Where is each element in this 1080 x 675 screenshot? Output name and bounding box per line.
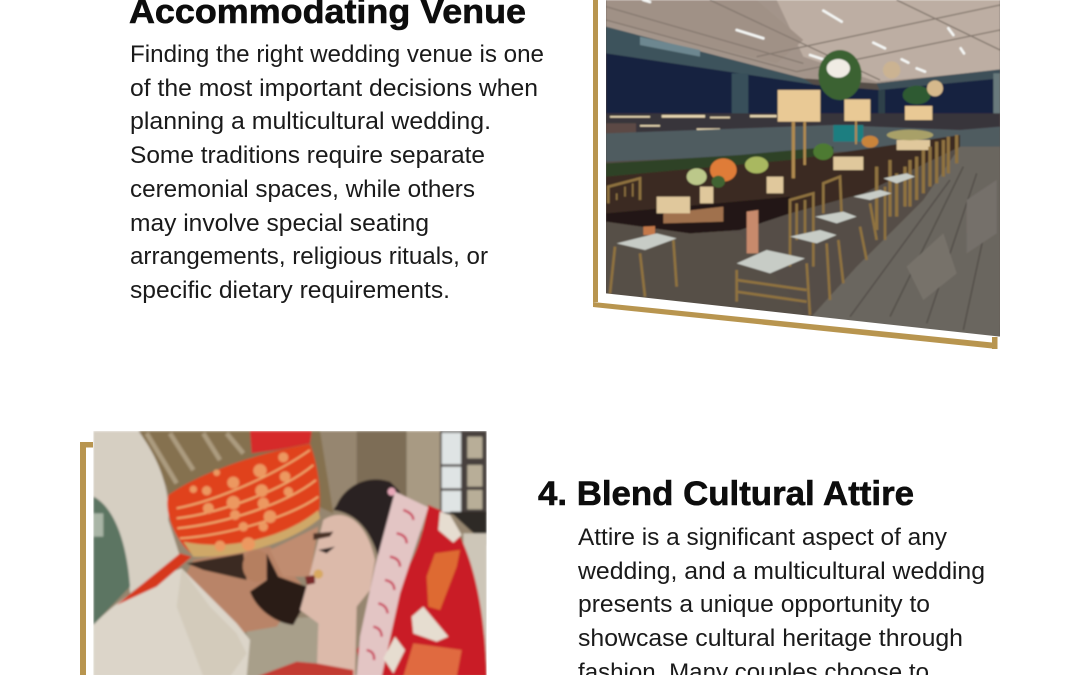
paragraph: venue description: Some traditions require separate <box>130 142 485 169</box>
paragraph: attire description: presents a unique opportunity to <box>578 591 930 618</box>
paragraph: venue description: Finding the right wedding venue is one <box>130 41 544 68</box>
paragraph: venue description <box>130 41 544 304</box>
paragraph: venue description: specific dietary requirements. <box>130 277 450 304</box>
paragraph: attire description: Attire is a significant aspect of any <box>578 524 947 551</box>
paragraph: venue description: of the most important decisions when <box>130 75 538 102</box>
section 3 text: accommodating venue <box>129 0 544 304</box>
paragraph: venue description: planning a multicultural wedding. <box>130 108 491 135</box>
paragraph: attire description: wedding, and a multicultural wedding <box>577 558 985 585</box>
paragraph: attire description <box>577 524 985 675</box>
paragraph: venue description: arrangements, religious rituals, or <box>130 243 488 270</box>
heading: blend cultural attire: 4. Blend Cultural Attire <box>538 475 914 513</box>
section 4 text: blend cultural attire <box>538 475 985 675</box>
gold frame: attire photo <box>80 442 93 675</box>
paragraph: venue description: may involve special seating <box>130 210 429 237</box>
paragraph: attire description: showcase cultural heritage through <box>578 625 963 652</box>
photo: rooftop wedding venue <box>603 0 1003 340</box>
photo: bride and groom kissing <box>93 431 487 675</box>
gold frame: venue photo <box>593 0 998 349</box>
paragraph: venue description: ceremonial spaces, while others <box>130 176 475 203</box>
